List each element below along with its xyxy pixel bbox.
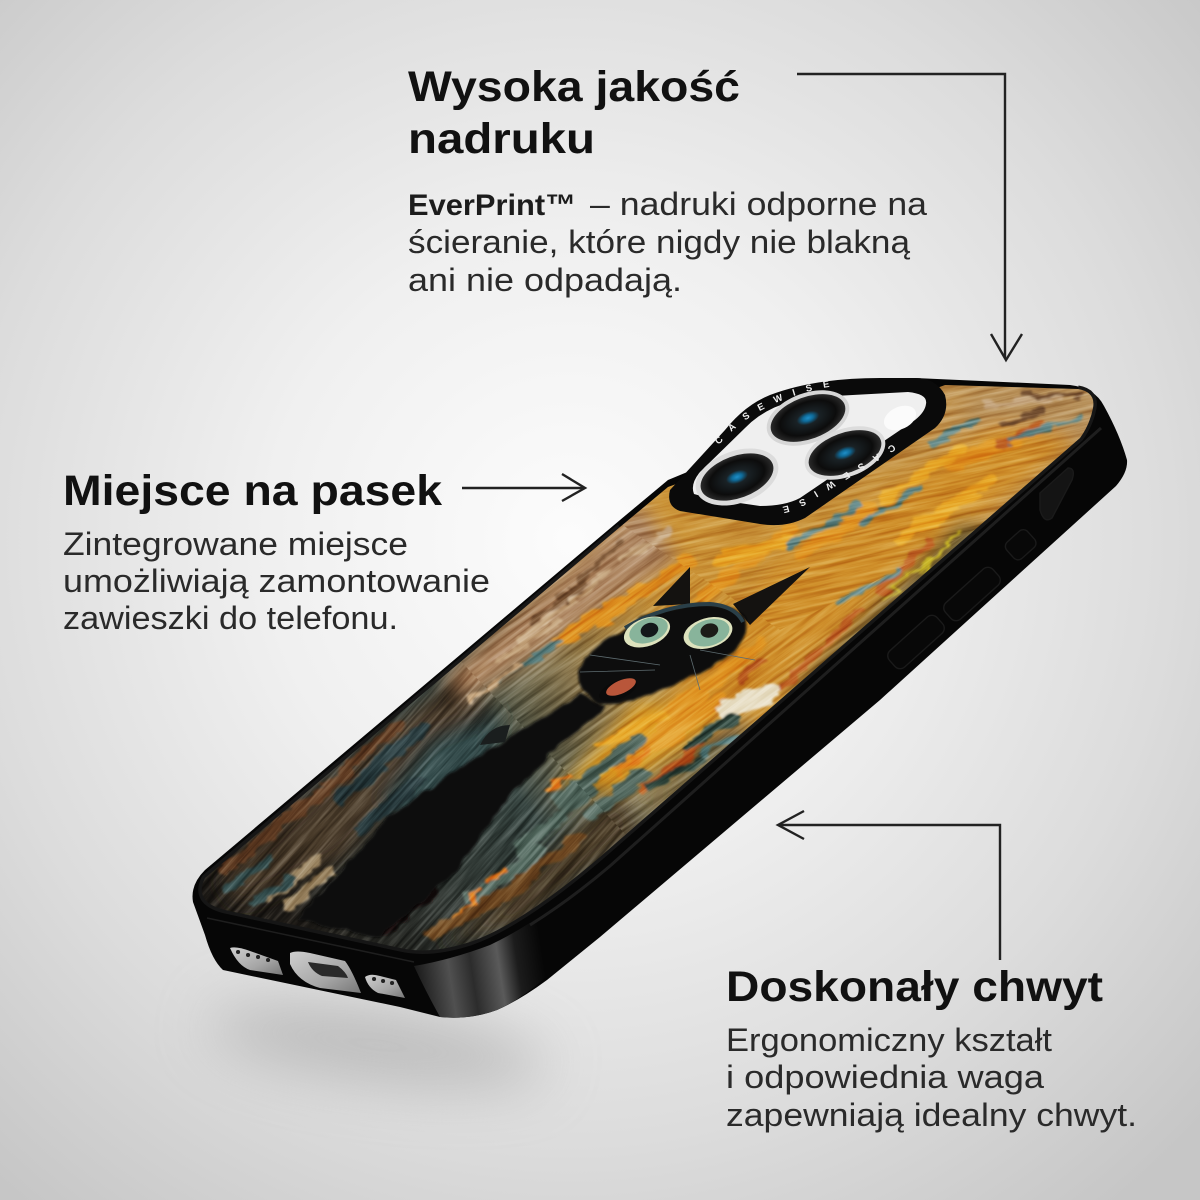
body: strap mount: Zintegrowane miejsce xyxy=(63,526,408,562)
body: strap mount: zawieszki do telefonu. xyxy=(63,600,398,636)
case rim xyxy=(202,389,1093,950)
black cat xyxy=(297,567,810,937)
streak texture xyxy=(202,385,1094,950)
cat ears xyxy=(653,567,810,625)
callout text: strap mount xyxy=(63,467,490,636)
arrow: print quality xyxy=(797,74,1022,360)
body: strap mount: umożliwiają zamontowanie xyxy=(63,563,490,599)
callout text: print quality xyxy=(408,63,927,298)
bottom ports xyxy=(230,947,405,998)
lens left xyxy=(688,438,786,516)
heading: strap mount: Miejsce na pasek xyxy=(63,467,442,515)
body: print quality: ścieranie, które nigdy nie blakną xyxy=(408,224,910,260)
body: grip: i odpowiednia waga xyxy=(726,1059,1044,1095)
phone shadow xyxy=(205,991,551,1099)
side rail highlight xyxy=(530,428,1101,925)
body: grip: zapewniają idealny chwyt. xyxy=(726,1097,1137,1133)
body: print quality: EverPrint™ xyxy=(408,189,576,222)
body: print quality: – nadruki odporne na xyxy=(590,186,927,222)
body: print quality xyxy=(408,186,927,298)
brand text on frame: CASEWISE xyxy=(782,445,895,514)
body: strap mount xyxy=(63,526,490,636)
callout text: grip xyxy=(726,963,1137,1133)
heading: print quality xyxy=(408,63,740,163)
cat right eye xyxy=(684,617,732,649)
right speaker xyxy=(365,975,405,998)
side buttons xyxy=(885,468,1073,672)
cat mouth xyxy=(596,674,640,706)
large colour areas xyxy=(220,392,1090,945)
raised paw xyxy=(480,725,510,745)
body: grip: Ergonomiczny kształt xyxy=(726,1022,1052,1058)
port opening xyxy=(308,962,348,978)
camera frame xyxy=(669,378,946,525)
paint base xyxy=(202,385,1094,950)
left speaker holes xyxy=(238,952,268,960)
cat head sheen xyxy=(625,604,743,628)
charging port xyxy=(290,952,361,993)
camera island xyxy=(669,378,946,526)
paint strokes xyxy=(225,395,1080,935)
brand text on frame xyxy=(716,381,895,514)
bottom seam xyxy=(207,918,414,962)
flash xyxy=(880,401,920,435)
cat tongue xyxy=(606,678,636,696)
heading: print quality: nadruku xyxy=(408,115,595,163)
heading: print quality: Wysoka jakość xyxy=(408,63,740,111)
cat head xyxy=(577,603,745,704)
arrow: strap mount xyxy=(462,474,585,501)
lens right xyxy=(797,416,893,490)
cat left eye xyxy=(624,616,670,648)
heading: grip: Doskonały chwyt xyxy=(726,963,1103,1011)
arrow: grip xyxy=(778,811,1000,960)
glossy corner xyxy=(414,910,548,1018)
camera glass xyxy=(693,392,926,506)
phone case xyxy=(192,378,1127,1018)
cat whiskers xyxy=(580,650,755,690)
body: grip xyxy=(726,1022,1137,1133)
left speaker xyxy=(230,947,283,975)
brand text on frame: CASEWISE xyxy=(716,381,830,444)
artwork: cat painting xyxy=(202,385,1094,950)
lens top xyxy=(759,380,857,456)
case body xyxy=(192,378,1127,1018)
right speaker holes xyxy=(374,979,392,983)
cat body xyxy=(297,695,607,937)
body: print quality: ani nie odpadają. xyxy=(408,262,682,298)
